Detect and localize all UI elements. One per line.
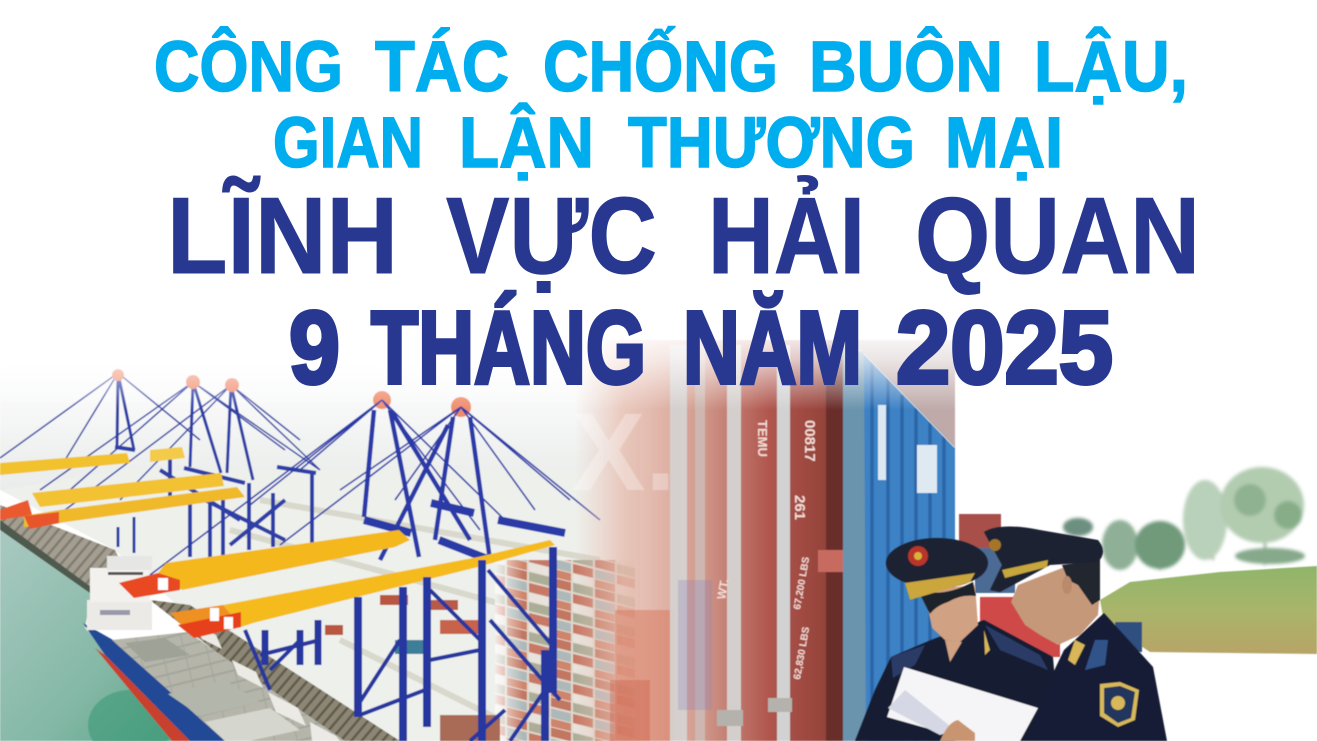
- back yellow booms: [0, 447, 245, 529]
- front crane legs: [245, 547, 560, 741]
- title line 1: TÁC: [375, 28, 509, 107]
- trees: [1063, 467, 1305, 570]
- red container doors: TEMU: [755, 420, 770, 457]
- title: [154, 27, 1200, 405]
- title line 3: VỰC: [446, 175, 657, 297]
- fade wall top: [0, 325, 960, 410]
- stacked containers: [959, 514, 1142, 657]
- title line 1: BUÔN: [809, 27, 1003, 107]
- title line 2: GIAN: [273, 104, 423, 183]
- red container doors: WT.: [714, 578, 732, 601]
- papers: [887, 667, 1038, 741]
- blue container side: [843, 345, 955, 741]
- back cranes: [0, 373, 320, 557]
- red container doors: 67,200 LBS: [792, 556, 812, 611]
- title line 3: HẢI: [708, 175, 865, 297]
- title line 4: NĂM: [683, 290, 862, 405]
- ship: [83, 556, 345, 741]
- title line 3: QUAN: [915, 175, 1200, 297]
- hand: [940, 720, 975, 741]
- title line 4: [289, 290, 1113, 405]
- red container doors: [572, 340, 845, 741]
- title line 1: CÔNG: [154, 27, 343, 107]
- photo: port with cranes and ship: [0, 360, 640, 741]
- shoulder badge: [1100, 682, 1139, 727]
- title line 1: [154, 27, 1188, 107]
- sea: [0, 530, 195, 741]
- yard containers: [325, 560, 635, 741]
- red container doors: 261: [791, 495, 808, 520]
- title line 1: CHỐNG: [543, 27, 778, 107]
- cap: [984, 526, 1103, 592]
- title line 4: 9: [289, 290, 340, 405]
- red container doors: X.: [572, 391, 676, 514]
- officer left: [855, 538, 1060, 741]
- front crane rigging: [150, 400, 600, 575]
- cap: [886, 538, 988, 600]
- apex blocks: [112, 369, 471, 417]
- officers: [855, 526, 1167, 741]
- title line 3: LĨNH: [167, 175, 398, 297]
- title line 4: 2025: [896, 290, 1113, 405]
- yellow booms: [119, 530, 555, 638]
- title line 2: LẬN: [459, 103, 594, 183]
- title line 2: THƯƠNG: [628, 104, 915, 183]
- title line 2: [273, 103, 1063, 183]
- grass hill: [1100, 566, 1317, 654]
- title line 3: [167, 175, 1200, 297]
- red container doors: 00817: [801, 420, 818, 462]
- title line 2: MẠI: [945, 104, 1063, 183]
- red container doors: 62,830 LBS: [792, 626, 812, 681]
- officer right: [984, 526, 1167, 741]
- title line 1: LẬU,: [1034, 27, 1188, 107]
- pier: [0, 505, 135, 593]
- background trees and hill: [959, 467, 1317, 657]
- title line 4: THÁNG: [371, 290, 646, 405]
- quay rails: [150, 600, 400, 741]
- panel: container wall: [572, 340, 955, 741]
